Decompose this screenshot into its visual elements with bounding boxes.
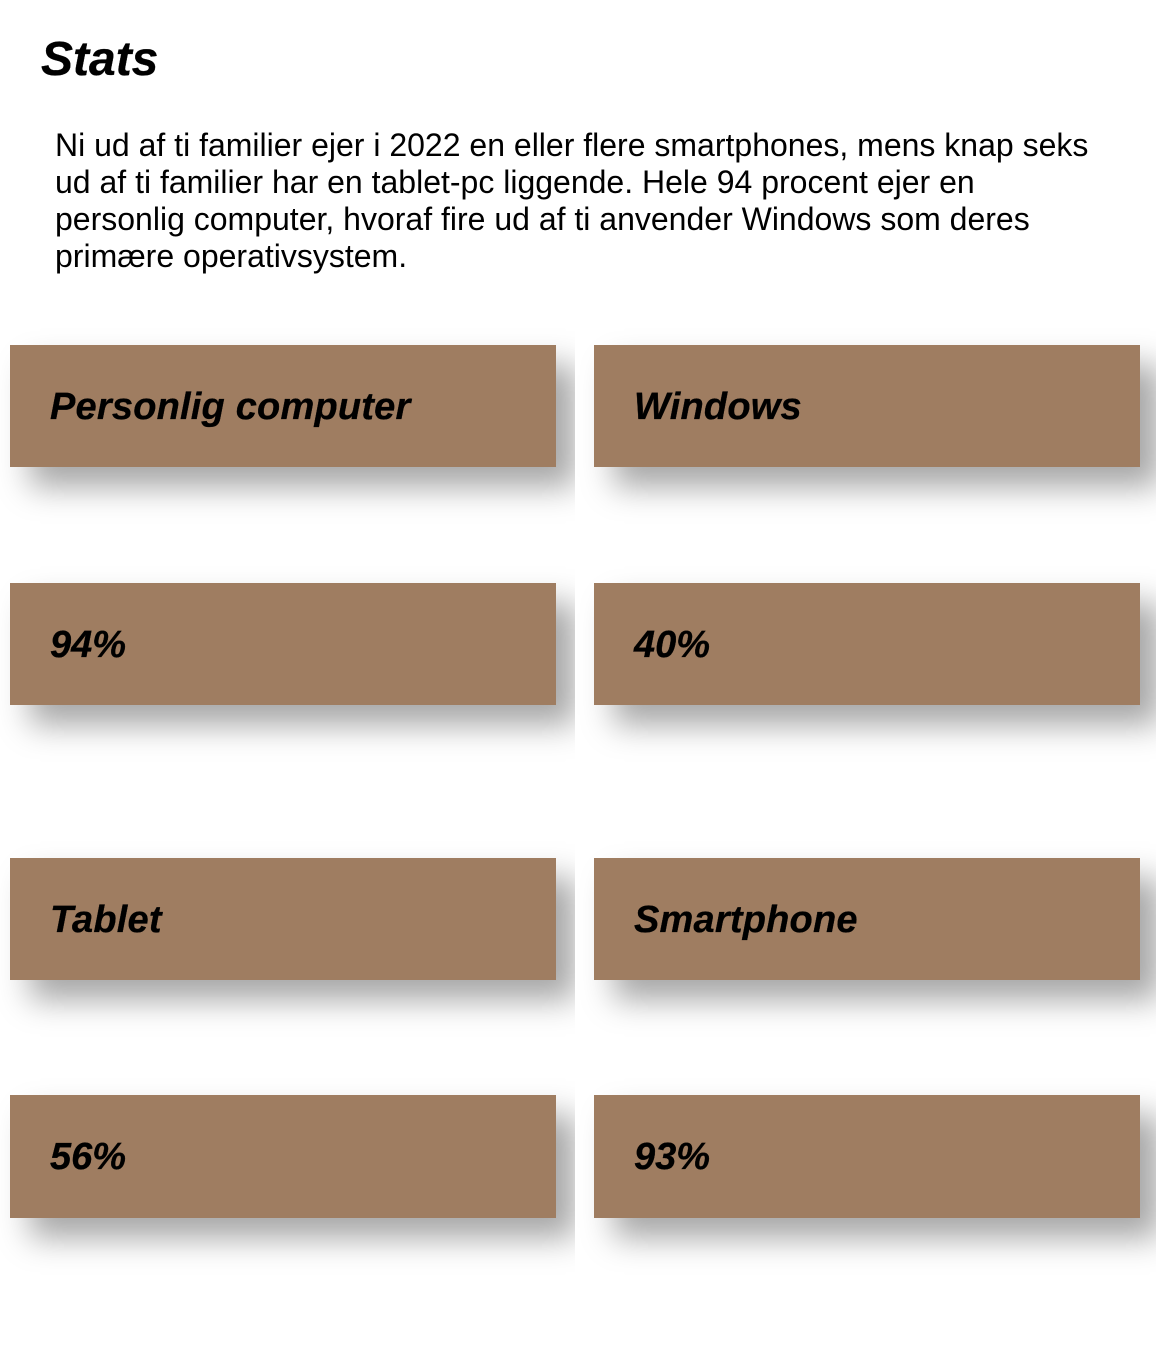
card: Tablet label: Tablet (50, 898, 162, 940)
intro text block: Ni ud af ti familier ejer i 2022 en eller flere smartphones, mens knap seks (55, 127, 1088, 163)
card: Windows label (594, 345, 1140, 467)
card: 40% value (594, 583, 1140, 705)
intro text block: ud af ti familier har en tablet-pc liggende. Hele 94 procent ejer en (55, 164, 975, 200)
card: Personlig computer label: Personlig computer (50, 386, 410, 428)
card: Smartphone label (594, 858, 1140, 980)
title: Stats (41, 33, 158, 86)
intro text block (55, 127, 1088, 274)
intro text block: personlig computer, hvoraf fire ud af ti anvender Windows som deres (55, 201, 1030, 237)
card: 93% value: 93% (634, 1136, 710, 1178)
card: 94% value (10, 583, 556, 705)
left column of stat cards (10, 345, 575, 1258)
card: 56% value: 56% (50, 1136, 126, 1178)
card: 94% value: 94% (50, 624, 126, 666)
card: Smartphone label: Smartphone (634, 898, 858, 940)
card: Tablet label (10, 858, 556, 980)
card: 56% value (10, 1095, 556, 1218)
intro text block: primære operativsystem. (55, 238, 407, 274)
card: Personlig computer label (10, 345, 556, 467)
card: Windows label: Windows (634, 386, 802, 428)
right column of stat cards (594, 345, 1156, 1258)
card: 93% value (594, 1095, 1140, 1218)
card: 40% value: 40% (634, 624, 710, 666)
